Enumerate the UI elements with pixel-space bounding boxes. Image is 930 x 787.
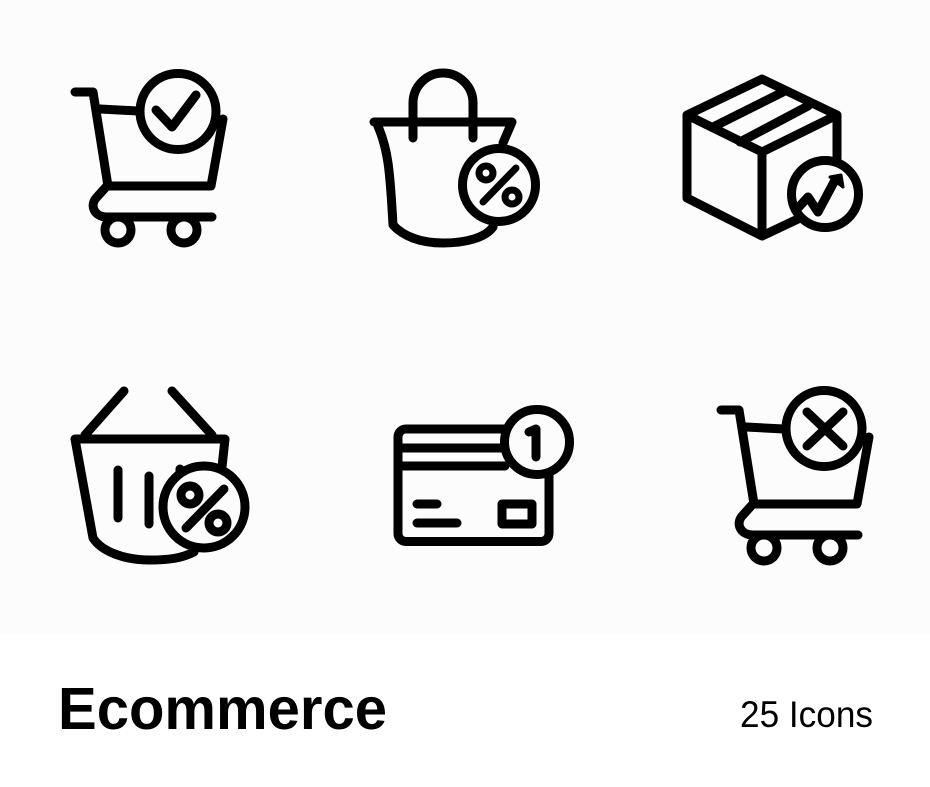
- icon: shopping cart with cross mark: [721, 390, 869, 561]
- icon: shopping basket with percent badge: [75, 391, 245, 560]
- icon detail: chart arrow head: [830, 175, 843, 187]
- icon: shopping cart with check mark: [75, 74, 223, 243]
- title: Ecommerce: [58, 676, 387, 742]
- icon: credit card with notification badge: [398, 410, 570, 542]
- icon count label: 25 Icons: [740, 694, 873, 735]
- icon: shopping bag with percent badge: [374, 73, 536, 243]
- icon: cardboard box with rising chart badge: [687, 79, 858, 236]
